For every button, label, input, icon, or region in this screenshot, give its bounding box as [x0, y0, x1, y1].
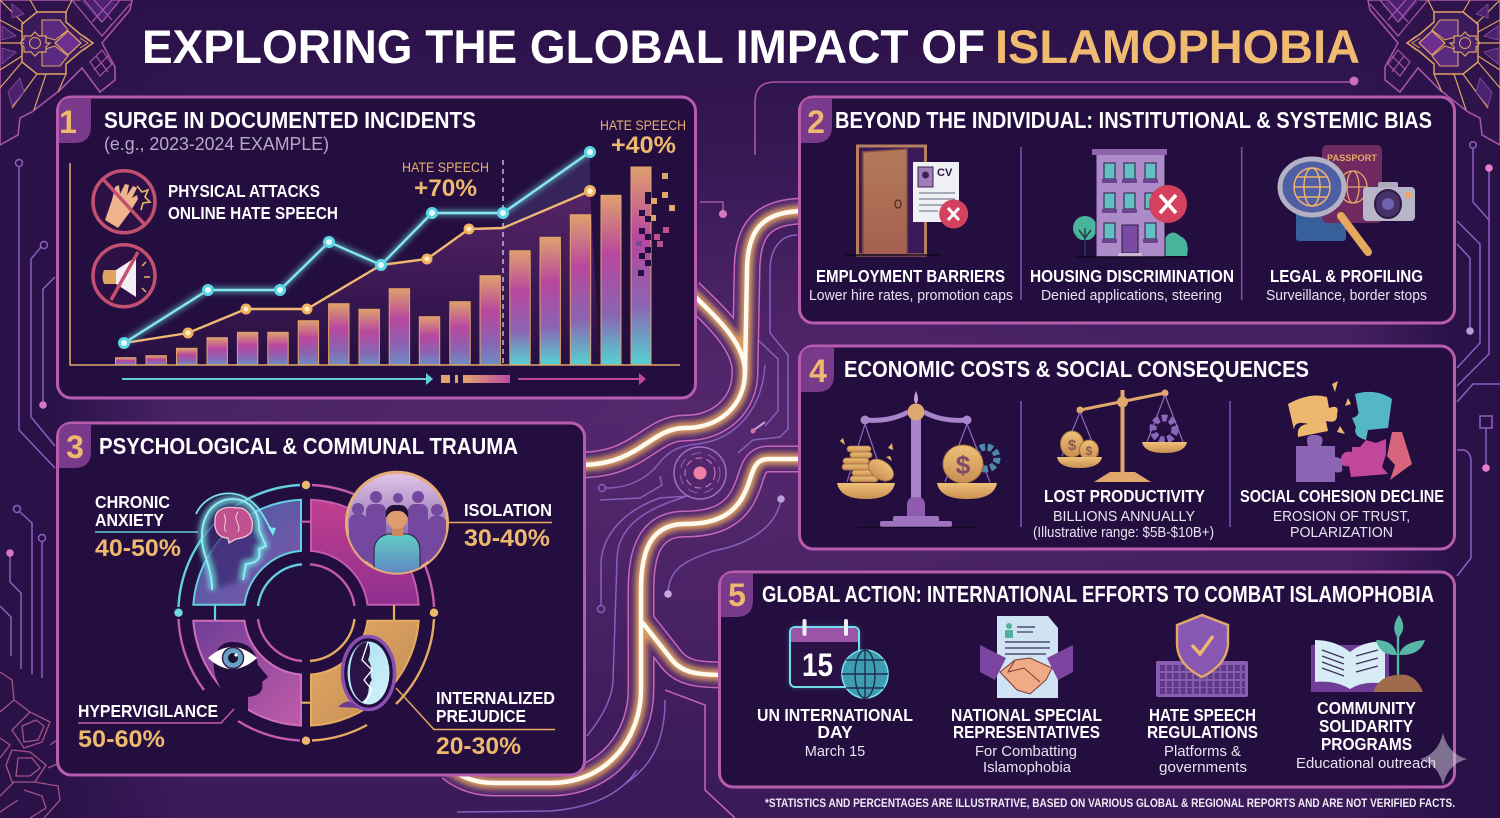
icon: hate speech prohibited: [93, 245, 155, 307]
line series: cyan: [120, 148, 594, 348]
label: housing discrimination: Denied applications, steering: [1041, 288, 1222, 304]
icon: passport, magnifier and camera: PASSPORT: [1327, 153, 1377, 164]
legend labels: [168, 181, 338, 223]
icon: housing rejection: [1073, 149, 1190, 257]
label: employment barriers: EMPLOYMENT BARRIERS: [816, 266, 1005, 286]
number badge 5: [721, 573, 753, 617]
number badge 1: 1: [59, 104, 77, 140]
left circuit traces: [0, 160, 55, 678]
label: chronic anxiety: 40-50%: [95, 535, 181, 562]
heading: economic costs: ECONOMIC COSTS & SOCIAL CONSEQUENCES: [844, 356, 1309, 382]
label: UN day: March 15: [805, 744, 865, 760]
label: hate speech regulations: REGULATIONS: [1147, 722, 1258, 742]
label: hate speech regulations: Platforms &: [1164, 744, 1241, 760]
callout: +40%: HATE SPEECH: [600, 117, 686, 133]
pixel dissolve on final bar: [636, 173, 675, 276]
icon: book and plant: [1311, 615, 1425, 692]
label: community solidarity: SOLIDARITY: [1319, 716, 1413, 736]
label: special representatives: NATIONAL SPECIAL: [951, 705, 1102, 725]
pink background traces and nodes: [664, 76, 1358, 818]
label: social cohesion: POLARIZATION: [1290, 525, 1393, 541]
icon: broken puzzle: [1288, 381, 1412, 482]
number badge 2: 2: [807, 104, 825, 140]
glowing connector network: [450, 211, 805, 783]
label: hypervigilance: 50-60%: [78, 726, 165, 753]
label: community solidarity: [1296, 698, 1436, 772]
label: UN day: DAY: [817, 722, 853, 742]
icon: cracked mirror: [338, 636, 394, 710]
label: social cohesion: SOCIAL COHESION DECLINE: [1240, 486, 1444, 506]
label: housing discrimination: HOUSING DISCRIMINATION: [1030, 266, 1234, 286]
label: internalized prejudice: 20-30%: [436, 733, 521, 760]
chart glow area: [124, 191, 600, 365]
subheading: years: (e.g., 2023-2024 EXAMPLE): [104, 134, 329, 154]
label: community solidarity: COMMUNITY: [1317, 698, 1416, 718]
label: employment barriers: [809, 266, 1013, 304]
panel 1: surge in documented incidents: [58, 97, 696, 398]
label: isolation: ISOLATION: [464, 500, 552, 520]
number badge 5: 5: [728, 577, 746, 613]
heading: surge: SURGE IN DOCUMENTED INCIDENTS: [104, 107, 476, 133]
number badge 4: 4: [809, 353, 827, 389]
connectors: [215, 522, 394, 703]
icon: door and rejected CV: [845, 146, 968, 255]
callout: +70%: HATE SPEECH: [402, 159, 489, 175]
label: social cohesion: [1240, 486, 1444, 541]
number badge 4: [801, 347, 834, 392]
label: lost productivity: (Illustrative range: $5B-$10B+): [1033, 525, 1214, 541]
icon: calendar and globe: 15: [802, 647, 833, 683]
panel 2: institutional and systemic bias: [800, 97, 1454, 323]
number badge 3: [59, 424, 91, 468]
outer ring: [178, 485, 434, 740]
donut diagram: [174, 481, 438, 745]
label: special representatives: REPRESENTATIVES: [953, 722, 1100, 742]
icon: eye and head silhouette: [208, 642, 268, 712]
chart area between series: [503, 152, 590, 228]
timeline arrow row: [122, 373, 646, 385]
label: isolation: [449, 500, 552, 552]
label: hypervigilance: HYPERVIGILANCE: [78, 701, 218, 721]
decorative corner ornament: top left: [0, 0, 132, 145]
label: hate speech regulations: [1147, 705, 1258, 776]
callout: +70%: +70%: [414, 175, 477, 202]
icon: isolated person: [346, 472, 448, 574]
label: UN day: [757, 705, 913, 760]
heading: trauma: PSYCHOLOGICAL & COMMUNAL TRAUMA: [99, 433, 518, 459]
panel 5: global action: [720, 572, 1454, 787]
central hub node: [674, 447, 726, 499]
callout: +40%: [600, 117, 686, 159]
label: housing discrimination: [1030, 266, 1234, 304]
number badge 2: [801, 98, 832, 143]
icon: head with brain: [196, 493, 276, 590]
label: lost productivity: [1033, 486, 1214, 541]
number badge 1: [59, 98, 91, 143]
label: internalized prejudice: PREJUDICE: [436, 706, 526, 726]
number badge 3: 3: [66, 429, 84, 465]
label: lost productivity: LOST PRODUCTIVITY: [1044, 486, 1205, 506]
decorative corner ornament: top right: [1368, 0, 1500, 145]
divider: [1020, 147, 1022, 300]
label: hate speech regulations: governments: [1159, 760, 1247, 776]
legend labels: ONLINE HATE SPEECH: [168, 203, 338, 223]
callout: +70%: [402, 159, 489, 202]
icon: document and handshake: [980, 616, 1073, 698]
callout: +40%: +40%: [611, 132, 676, 159]
panel 3: psychological and communal trauma: [58, 423, 584, 775]
icon: calendar and globe: [790, 619, 888, 698]
label: special representatives: For Combatting: [975, 744, 1077, 760]
label: community solidarity: Educational outreach: [1296, 756, 1436, 772]
sparkle mark: [1420, 733, 1467, 785]
panel 4: economic costs and social consequences: [800, 346, 1454, 549]
icon: large scale with coins: [837, 391, 997, 528]
label: lost productivity: BILLIONS ANNUALLY: [1053, 509, 1195, 525]
icon: tilted scale with coins and gear: [1057, 390, 1187, 482]
label: special representatives: Islamophobia: [983, 760, 1072, 776]
label: community solidarity: PROGRAMS: [1321, 734, 1412, 754]
label: legal and profiling: LEGAL & PROFILING: [1270, 266, 1423, 286]
label: special representatives: [951, 705, 1102, 776]
icon: shield and keyboard: [1156, 615, 1248, 697]
central circuit traces: [457, 235, 797, 812]
line series: orange: [124, 186, 594, 343]
label: social cohesion: EROSION OF TRUST,: [1273, 509, 1410, 525]
title: ISLAMOPHOBIA: [995, 20, 1360, 73]
icon: tilted scale with coins and gear: $: [1068, 437, 1077, 454]
decorative corner ornament: bottom left: [0, 672, 60, 818]
right circuit traces: [1457, 142, 1500, 576]
label: internalized prejudice: [396, 688, 555, 760]
label: chronic anxiety: CHRONIC: [95, 492, 170, 512]
label: legal and profiling: Surveillance, border stops: [1266, 288, 1427, 304]
divider: [1229, 401, 1231, 527]
dashed marker line: [502, 160, 504, 365]
label: internalized prejudice: INTERNALIZED: [436, 688, 555, 708]
label: hypervigilance: [78, 701, 234, 753]
ring nodes: [174, 481, 438, 745]
label: employment barriers: Lower hire rates, promotion caps: [809, 288, 1013, 304]
icon: tilted scale with coins and gear: $: [1086, 444, 1093, 458]
quadrants: [193, 500, 301, 605]
inner ring: [258, 564, 354, 661]
label: hate speech regulations: HATE SPEECH: [1149, 705, 1256, 725]
label: chronic anxiety: ANXIETY: [95, 510, 164, 530]
icon: door and rejected CV: CV: [937, 167, 953, 179]
label: UN day: UN INTERNATIONAL: [757, 705, 913, 725]
chart axes: [70, 163, 680, 365]
label: chronic anxiety: [95, 492, 198, 562]
divider: [1020, 401, 1022, 527]
icon: passport, magnifier and camera: [1280, 145, 1415, 252]
divider: [1241, 147, 1243, 300]
bar chart: [116, 167, 651, 365]
icon: large scale with coins: $: [956, 450, 971, 480]
legend labels: PHYSICAL ATTACKS: [168, 181, 320, 201]
icon: physical attack prohibited: [93, 171, 155, 233]
title: EXPLORING THE GLOBAL IMPACT OF: [142, 20, 985, 73]
label: legal and profiling: [1266, 266, 1427, 304]
label: isolation: 30-40%: [464, 525, 550, 552]
